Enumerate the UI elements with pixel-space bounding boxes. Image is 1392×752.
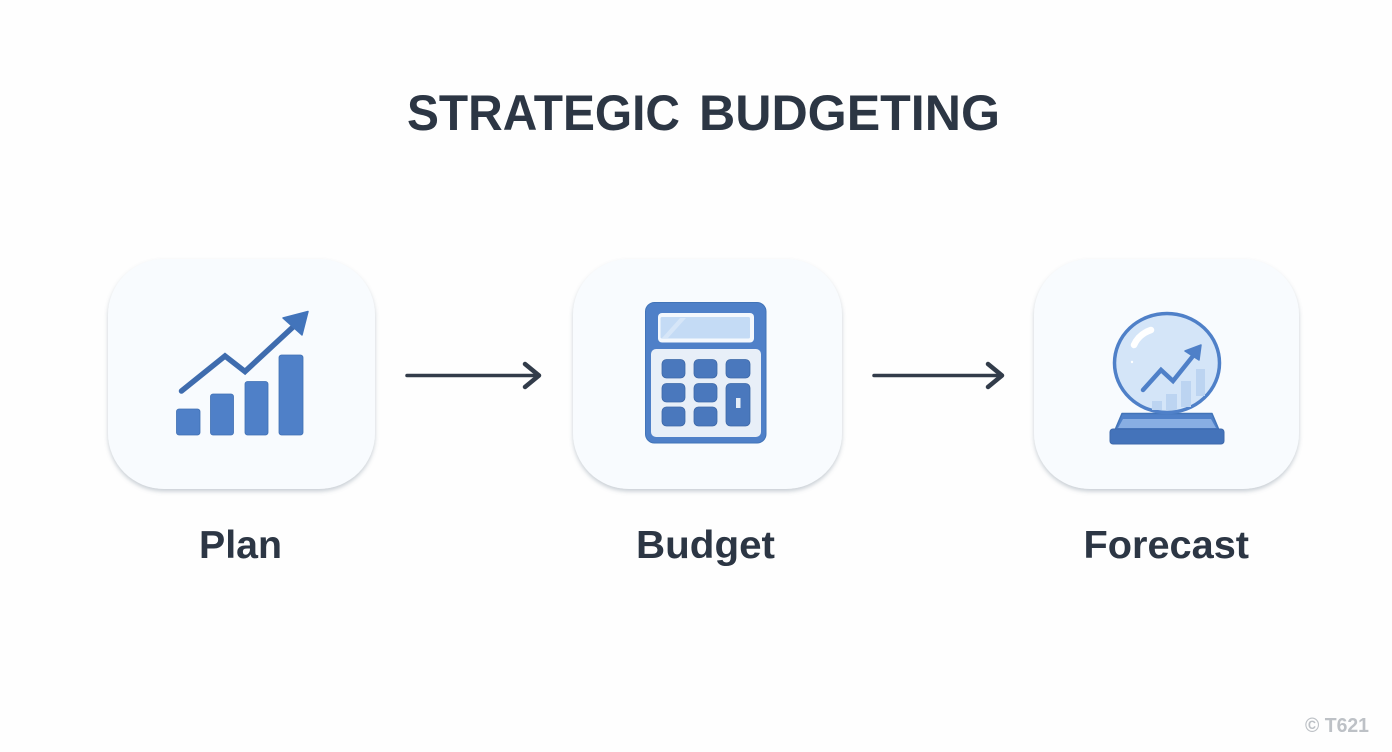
card: plan: [108, 259, 375, 489]
card: budget: [573, 259, 842, 489]
title: STRATEGIC: [407, 85, 680, 141]
icon: crystal ball with chart: [1110, 314, 1224, 444]
panel: plan: [108, 259, 375, 567]
label: forecast: Forecast: [1084, 524, 1249, 567]
label: plan: Plan: [199, 524, 282, 567]
arrow: budget to forecast: [874, 364, 1002, 387]
icon: calculator: [646, 302, 766, 443]
icon: bar chart with rising arrow: [176, 312, 308, 435]
card: forecast: [1034, 259, 1299, 489]
panel: budget: [573, 259, 842, 567]
title: [407, 85, 1000, 141]
title: BUDGETING: [699, 85, 1000, 141]
arrow: plan to budget: [407, 364, 539, 387]
watermark: © T621: [1305, 715, 1369, 737]
panel: forecast: [1034, 259, 1299, 567]
label: budget: Budget: [636, 524, 775, 567]
